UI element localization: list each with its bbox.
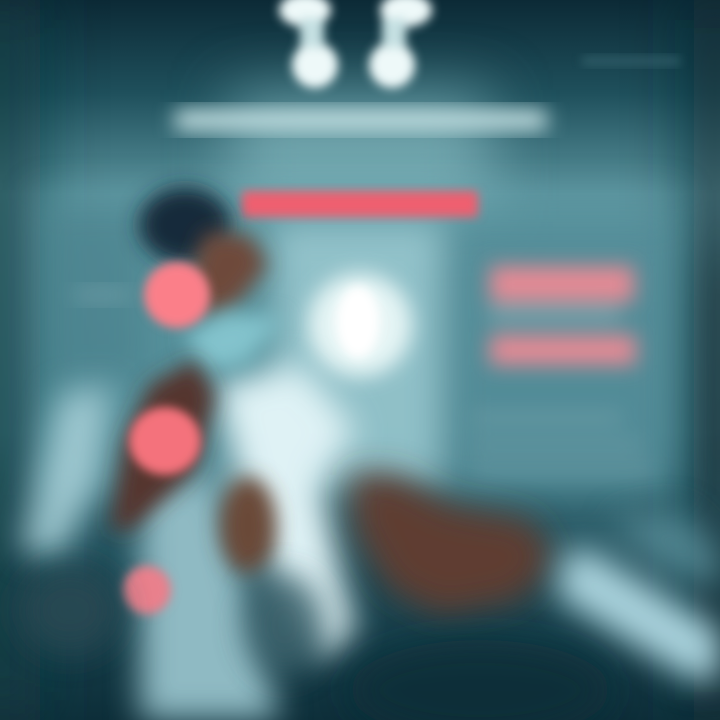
title xyxy=(175,110,547,130)
figure: neck and torso skin xyxy=(110,360,215,530)
figure: arm xyxy=(220,477,276,573)
heading: red banner xyxy=(242,191,478,217)
figure: patient arm xyxy=(350,475,555,615)
text block: left label xyxy=(75,288,130,302)
figure: pink highlight lower xyxy=(123,566,171,614)
figure: dark lower shape xyxy=(20,565,120,655)
background: bottom dark area xyxy=(350,640,610,720)
figure: face xyxy=(190,232,268,320)
figure: dark hair xyxy=(139,187,231,263)
figure: patient sleeve xyxy=(555,510,720,680)
figure: pink highlight chest xyxy=(129,407,201,475)
figure: person xyxy=(20,187,355,720)
figure: surgical mask xyxy=(185,312,285,370)
text block: pink callouts xyxy=(490,266,636,365)
figure: lab coat xyxy=(20,365,355,720)
figure: pink highlight head xyxy=(144,262,210,328)
text block: lower right lines xyxy=(472,412,652,475)
panel: central board xyxy=(35,190,680,495)
text block: top right caption xyxy=(582,56,680,66)
icon: central white circle xyxy=(308,273,412,377)
icon: top white figures xyxy=(279,0,432,88)
